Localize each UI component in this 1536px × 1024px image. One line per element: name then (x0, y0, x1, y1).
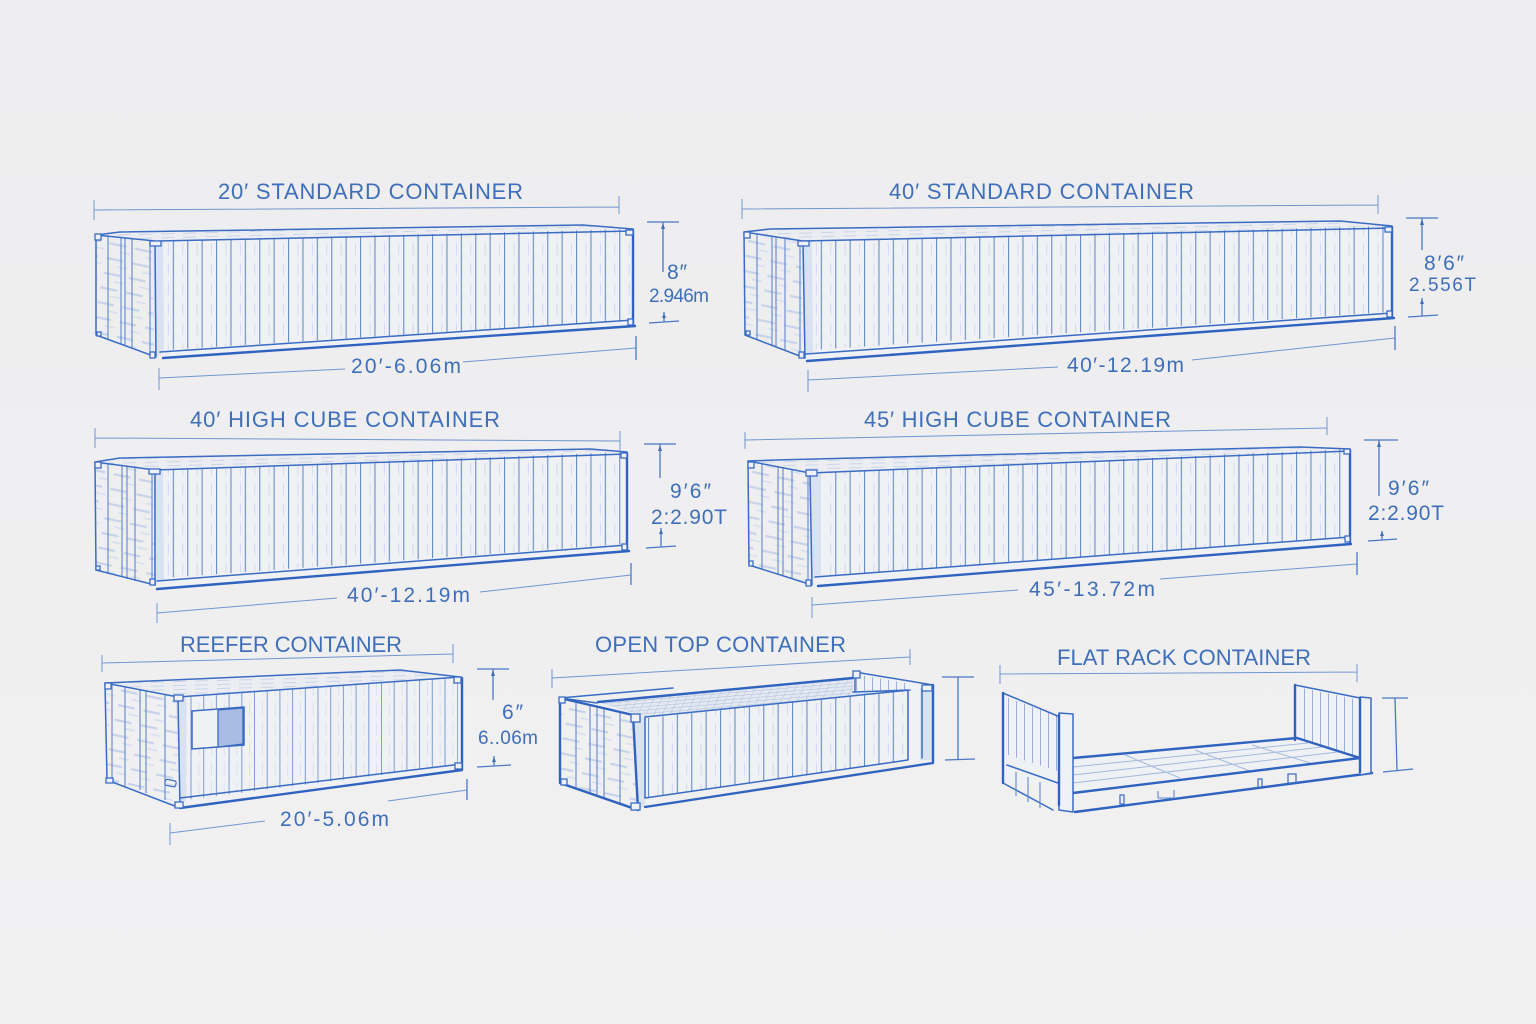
container drawing (95, 225, 635, 358)
panel: reefer container (102, 632, 538, 845)
dimension: height (942, 677, 975, 760)
heading: FLAT RACK CONTAINER (1057, 645, 1311, 670)
dimension: length 45 ft: 45′-13.72m (1029, 578, 1155, 601)
container drawing (748, 446, 1351, 586)
dimension: height 8 ft 6 in: 2.556T (1409, 275, 1476, 296)
heading: REEFER CONTAINER (180, 632, 402, 657)
dimension: length 40 ft: 40′-12.19m (1067, 354, 1184, 377)
dimension: top length line (1000, 664, 1357, 684)
dimension: length 20 ft (159, 336, 636, 390)
dimension: height 8 in (647, 222, 709, 323)
dimension: height 9 ft 6 in: 9′6″ (670, 480, 712, 503)
dimension: top length line (552, 649, 910, 688)
dimension: length 45 ft (812, 552, 1357, 618)
dimension: height 8 in: 2.946m (649, 286, 709, 307)
panel: 40' standard container (742, 179, 1476, 392)
panel: 40' high cube container (95, 407, 727, 623)
container drawing (105, 670, 462, 808)
reefer window (192, 707, 244, 749)
dimension: height 8 ft 6 in (1406, 218, 1476, 317)
dimension: top length line (95, 428, 620, 450)
dimension: height 9 ft 6 in: 2:2.90T (1368, 502, 1444, 525)
panel: open top container (552, 632, 975, 810)
dimension: height 9 ft 6 in (1364, 440, 1444, 541)
heading: OPEN TOP CONTAINER (595, 632, 846, 657)
dimension: height 8 ft 6 in: 8′6″ (1424, 252, 1465, 275)
dimension: length 20 ft: 20′-5.06m (280, 808, 389, 831)
container drawing (95, 448, 629, 589)
dimension: length 40 ft: 40′-12.19m (347, 584, 470, 607)
dimension: length 20 ft: 20′-6.06m (351, 355, 461, 378)
container drawing (744, 221, 1394, 361)
panel: 20' standard container (94, 179, 709, 390)
dimension: height 9 ft 6 in (644, 444, 727, 548)
heading: 20′ STANDARD CONTAINER (218, 179, 523, 204)
dimension: top length line (94, 196, 619, 220)
dimension: length 40 ft (808, 326, 1395, 392)
panel: 45' high cube container (745, 407, 1444, 618)
dimension: height 9 ft 6 in: 2:2.90T (651, 506, 727, 529)
dimension: height 6 in: 6″ (502, 701, 524, 724)
dimension: top length line (102, 644, 453, 672)
end posts (1016, 697, 1371, 812)
dimension: height 8 in: 8″ (667, 261, 688, 284)
dimension: height 6 in (477, 669, 538, 767)
dimension: top length line (742, 195, 1378, 219)
heading: 40′ STANDARD CONTAINER (889, 179, 1194, 204)
dimension: height 9 ft 6 in: 9′6″ (1388, 477, 1430, 500)
panel: flat rack container (1000, 645, 1413, 812)
dimension: top length line (745, 417, 1327, 449)
heading: 45′ HIGH CUBE CONTAINER (864, 407, 1171, 432)
container drawing (1003, 685, 1372, 812)
dimension: length 40 ft (157, 563, 631, 623)
container drawing (559, 671, 933, 810)
heading: 40′ HIGH CUBE CONTAINER (190, 407, 500, 432)
dimension: height (1382, 698, 1413, 772)
dimension: length 20 ft (170, 779, 467, 845)
dimension: height 6 in: 6..06m (478, 728, 538, 749)
